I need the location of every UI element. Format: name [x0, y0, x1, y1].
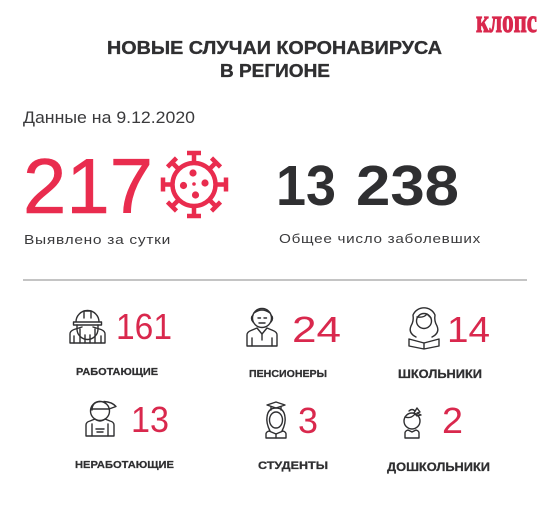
big number: total: 238 [356, 154, 459, 218]
icon: worker [70, 310, 105, 343]
number: 14 [447, 309, 490, 350]
caption: total cases: Общее число заболевших [279, 231, 481, 246]
label: РАБОТАЮЩИЕ [76, 367, 158, 378]
icon: schoolgirl with book [409, 308, 439, 349]
stat: pensioners [247, 308, 341, 380]
number: 161 [116, 306, 172, 347]
icon: little girl with bow [404, 408, 421, 438]
stat: students [258, 400, 328, 472]
icon: graduate girl [266, 402, 286, 438]
icon: man in cap [86, 402, 116, 436]
label: ШКОЛЬНИКИ [398, 367, 482, 381]
stat: unemployed [75, 399, 174, 471]
icon: old man [247, 308, 277, 346]
title [107, 37, 442, 81]
date text: Данные на 9.12.2020 [23, 108, 195, 127]
number: 13 [131, 399, 169, 440]
number: 2 [442, 400, 463, 441]
label: ПЕНСИОНЕРЫ [249, 369, 327, 380]
stat: working [70, 306, 172, 378]
big number: 217: 217 [23, 142, 153, 230]
stat: schoolchildren [398, 308, 490, 381]
big number: total [276, 154, 459, 218]
icon: virus [163, 153, 226, 216]
stat: preschoolers [387, 400, 490, 474]
title: НОВЫЕ СЛУЧАИ КОРОНАВИРУСА [107, 37, 442, 58]
label: НЕРАБОТАЮЩИЕ [75, 459, 174, 471]
number: 24 [292, 309, 341, 350]
caption: detected per day: Выявлено за сутки [24, 232, 171, 247]
label: ДОШКОЛЬНИКИ [387, 460, 490, 474]
label: СТУДЕНТЫ [258, 460, 328, 472]
big number: total: 13 [276, 154, 336, 218]
title: В РЕГИОНЕ [220, 60, 330, 81]
number: 3 [298, 400, 318, 441]
